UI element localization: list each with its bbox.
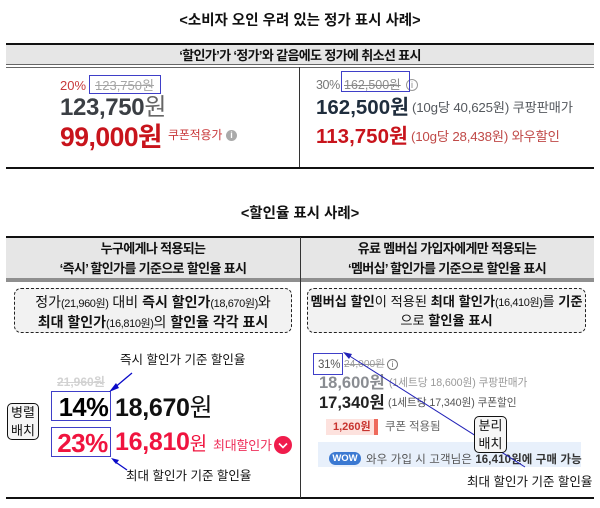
callout: left criteria: 정가(21,960원) 대비 즉시 할인가(18,670원)와 bbox=[35, 294, 271, 310]
tag: side by side placement: 병렬 bbox=[11, 405, 35, 420]
right heading: 유료 멤버십 가입자에게만 적용되는 bbox=[358, 241, 536, 256]
struck list price: 123,750원 bbox=[95, 78, 154, 93]
price: 123,750원 bbox=[60, 94, 166, 121]
annotation: max price rate: 최대 할인가 기준 할인율 bbox=[467, 475, 592, 489]
example: member product price bbox=[318, 358, 582, 467]
highlighted rate: 23%: 23% bbox=[57, 428, 108, 458]
icon: info bbox=[387, 359, 398, 370]
arrow: to 23% box bbox=[111, 458, 128, 470]
WOW badge: WOW bbox=[332, 453, 358, 464]
tag: separate placement bbox=[474, 416, 507, 453]
icon: info: i bbox=[392, 360, 393, 369]
tag: side by side placement bbox=[7, 403, 39, 440]
callout: left criteria bbox=[14, 288, 292, 333]
heading double rule bbox=[6, 64, 594, 68]
icon: info: i bbox=[230, 130, 233, 140]
title: misleading list price examples: <소비자 오인 우려 있는 정가 표시 사례> bbox=[179, 13, 421, 29]
arrow: to 31% box bbox=[343, 352, 526, 468]
struck list price: 24,000원 bbox=[344, 359, 385, 370]
coupon tag: 1,260원 bbox=[333, 421, 371, 433]
left heading: 누구에게나 적용되는 bbox=[101, 241, 205, 256]
discount rate: 30% bbox=[316, 78, 340, 92]
table heading: ‘할인가’가 ‘정가’와 같음에도 정가에 취소선 표시 bbox=[179, 48, 421, 63]
callout: left criteria: 최대 할인가(16,810원)의 할인율 각각 표시 bbox=[38, 314, 268, 330]
tag: separate placement: 배치 bbox=[479, 436, 502, 451]
price note: (10g당 40,625원) 쿠팡판매가 bbox=[412, 100, 573, 115]
tag: separate placement: 분리 bbox=[479, 418, 502, 433]
WOW text: 와우 가입 시 고객님은 16,410원에 구매 가능 bbox=[366, 454, 582, 466]
regular price: 18,600원 bbox=[319, 374, 385, 392]
panel: discount rate table bbox=[6, 236, 594, 499]
WOW notice bbox=[318, 442, 581, 467]
struck list price: 162,500원 bbox=[344, 78, 401, 92]
left heading bbox=[6, 238, 300, 279]
coupon label: 쿠폰적용가 bbox=[168, 128, 222, 142]
callout: right criteria: 멤버십 할인이 적용된 최대 할인가(16,410원)를 기준 bbox=[310, 294, 583, 309]
heading rule bbox=[6, 278, 594, 282]
callout: right criteria bbox=[307, 288, 586, 333]
highlighted rate: 14%: 14% bbox=[59, 394, 108, 422]
regular note: (1세트당 18,600원) 쿠팡판매가 bbox=[389, 377, 527, 389]
panel: list price table bbox=[6, 43, 594, 169]
blue highlight: right list price bbox=[341, 71, 410, 92]
arrow: to 14% box bbox=[109, 372, 132, 392]
annotation: instant price rate: 즉시 할인가 기준 할인율 bbox=[120, 353, 245, 367]
discount rate: 31% bbox=[318, 359, 340, 371]
max discount price: 16,810원 bbox=[115, 428, 207, 456]
left heading: ‘즉시’ 할인가를 기준으로 할인율 표시 bbox=[60, 261, 246, 276]
icon: info bbox=[406, 79, 418, 91]
coupon tag bbox=[326, 419, 378, 435]
icon: info: i bbox=[411, 80, 413, 90]
title: discount rate examples: <할인율 표시 사례> bbox=[241, 206, 359, 222]
right heading bbox=[300, 238, 594, 279]
blue highlight: 31% bbox=[313, 353, 343, 375]
annotation: max price rate: 최대 할인가 기준 할인율 bbox=[126, 469, 251, 483]
coupon price: 17,340원 bbox=[319, 394, 385, 412]
blue highlight: left list price bbox=[89, 75, 161, 94]
max discount label: 최대할인가 bbox=[213, 438, 272, 453]
example: left product price bbox=[60, 78, 166, 152]
sale note: (10g당 28,438원) 와우할인 bbox=[411, 129, 560, 144]
sale price: 113,750원 bbox=[316, 125, 408, 148]
example: right product price bbox=[316, 78, 573, 148]
struck regular price: 21,960원 bbox=[57, 375, 105, 389]
right heading: ‘멤버십’ 할인가를 기준으로 할인율 표시 bbox=[348, 261, 546, 276]
discount rate: 20% bbox=[60, 78, 86, 93]
column divider bbox=[299, 67, 300, 167]
tag: side by side placement: 배치 bbox=[11, 423, 35, 438]
coupon price: 99,000원 bbox=[60, 122, 162, 152]
icon: info bbox=[226, 130, 237, 141]
icon: red chevron badge bbox=[274, 436, 292, 454]
column divider bbox=[300, 237, 301, 498]
table heading bbox=[6, 45, 594, 65]
coupon note: (1세트당 17,340원) 쿠폰할인 bbox=[388, 397, 516, 409]
price: 162,500원 bbox=[316, 96, 409, 119]
coupon applied: 쿠폰 적용됨 bbox=[385, 421, 440, 433]
WOW badge bbox=[329, 452, 361, 465]
callout: right criteria: 으로 할인율 표시 bbox=[400, 313, 493, 328]
instant price: 18,670원 bbox=[115, 394, 212, 422]
